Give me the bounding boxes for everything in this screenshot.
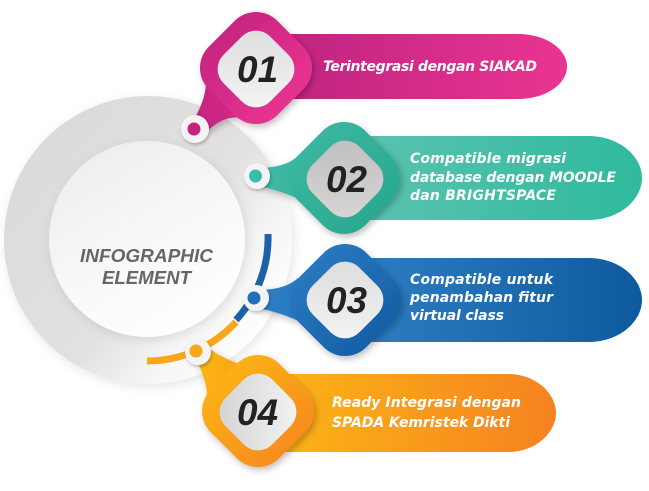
number badge 02 bbox=[298, 132, 392, 226]
bar text 03 bbox=[409, 272, 555, 324]
progress arc: orange segment bbox=[147, 322, 236, 361]
item 02 bbox=[244, 110, 642, 246]
number 01: 01 bbox=[237, 49, 278, 90]
center title bbox=[80, 245, 214, 288]
number 02: 02 bbox=[326, 159, 367, 200]
pin 02 bbox=[262, 110, 412, 246]
bar text 04 bbox=[332, 395, 521, 431]
bar text 02: dan BRIGHTSPACE bbox=[410, 188, 556, 204]
bar text 02: database dengan MOODLE bbox=[410, 170, 616, 186]
item 04 bbox=[185, 339, 556, 479]
inner white disc bbox=[49, 141, 245, 337]
pin 01 bbox=[188, 0, 324, 136]
number badge 04 bbox=[211, 365, 305, 459]
bar text 04: SPADA Kemristek Dikti bbox=[332, 415, 510, 431]
node 03 bbox=[243, 285, 269, 311]
bar text 01: Terintegrasi dengan SIAKAD bbox=[323, 59, 537, 75]
progress arc: blue segment bbox=[236, 234, 268, 320]
node 02 bbox=[244, 163, 270, 189]
bar 04 bbox=[280, 374, 556, 452]
number badge 03 bbox=[298, 253, 392, 347]
number 04: 04 bbox=[237, 392, 278, 433]
bar text 03: penambahan fitur bbox=[409, 290, 554, 306]
pin 03 bbox=[262, 232, 413, 368]
bar 01 bbox=[290, 34, 567, 99]
item 03 bbox=[243, 232, 642, 368]
number badge 01 bbox=[209, 22, 303, 116]
item 01 bbox=[181, 0, 567, 143]
bar 02 bbox=[350, 136, 642, 220]
bar text 04: Ready Integrasi dengan bbox=[332, 395, 521, 411]
outer grey disc bbox=[4, 96, 292, 384]
bar text 02 bbox=[410, 151, 616, 204]
bar text 02: Compatible migrasi bbox=[410, 151, 566, 167]
center title: ELEMENT bbox=[102, 267, 193, 288]
pin 04 bbox=[190, 343, 326, 479]
bar text 03: Compatible untuk bbox=[410, 272, 555, 288]
center title: INFOGRAPHIC bbox=[80, 245, 214, 266]
central circle graphic bbox=[4, 96, 292, 384]
number 03: 03 bbox=[326, 280, 367, 321]
node 04 bbox=[185, 339, 211, 365]
node 01 bbox=[181, 115, 209, 143]
bar text 03: virtual class bbox=[410, 308, 504, 324]
bar 03 bbox=[350, 258, 642, 342]
